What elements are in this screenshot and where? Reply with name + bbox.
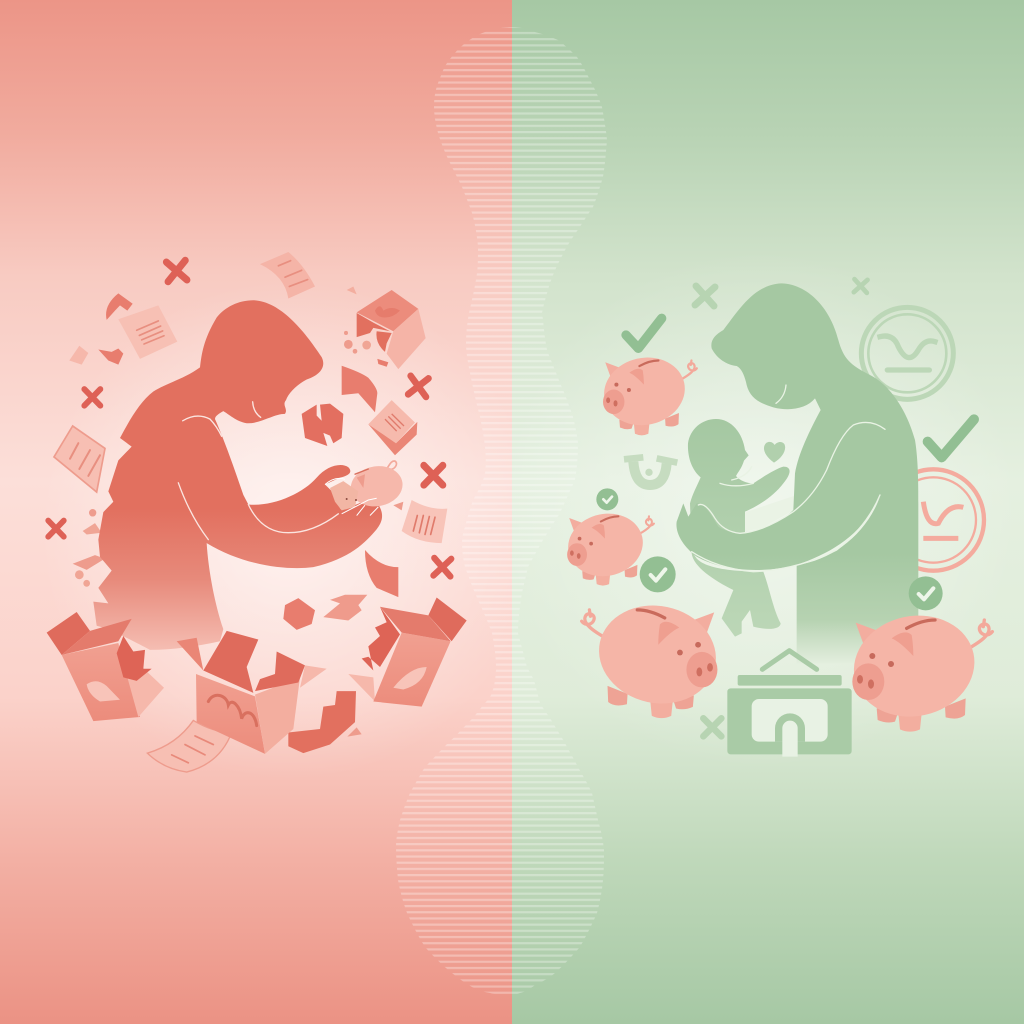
open document book: [368, 400, 417, 455]
piggy bank, middle left: [562, 507, 654, 586]
piggy bank, bottom left: [582, 595, 725, 718]
icon: x marks, red: [48, 260, 451, 576]
background: right green half: [512, 0, 1024, 1024]
green check marks: [626, 318, 974, 457]
green badge with wave, behind figure: [861, 307, 953, 399]
piggy bank held in hands: [325, 461, 405, 516]
heart icon: [764, 442, 785, 463]
broken box, bottom left: [47, 612, 164, 721]
baby silhouette: [688, 419, 790, 637]
broken box, bottom centre: [177, 631, 327, 754]
piggy bank, top left: [598, 350, 697, 435]
person silhouette, green: [676, 283, 918, 663]
white contour lines on figure: [692, 385, 885, 572]
right scene: figure cradling baby: [562, 279, 992, 757]
piggy bank, bottom right: [844, 605, 992, 732]
white contour lines on figure: [178, 402, 338, 540]
torn box, top right: [357, 290, 426, 369]
pale green x marks: [695, 279, 867, 736]
central wavy striped shape: [396, 27, 607, 995]
flying paper documents: [54, 252, 447, 772]
badges with check: [596, 488, 676, 592]
broken box, bottom right: [348, 597, 467, 707]
broken shards: [73, 286, 398, 753]
horseshoe icon: [624, 457, 677, 485]
pink badge with wave, behind figure: [883, 469, 984, 571]
person silhouette, red: [93, 300, 382, 650]
bank building icon: [727, 651, 852, 757]
shirt gap: [745, 496, 795, 532]
background: left warm half: [0, 0, 512, 1024]
left scene: figure losing savings: [47, 252, 467, 772]
badge with check, bottom right: [909, 576, 943, 610]
